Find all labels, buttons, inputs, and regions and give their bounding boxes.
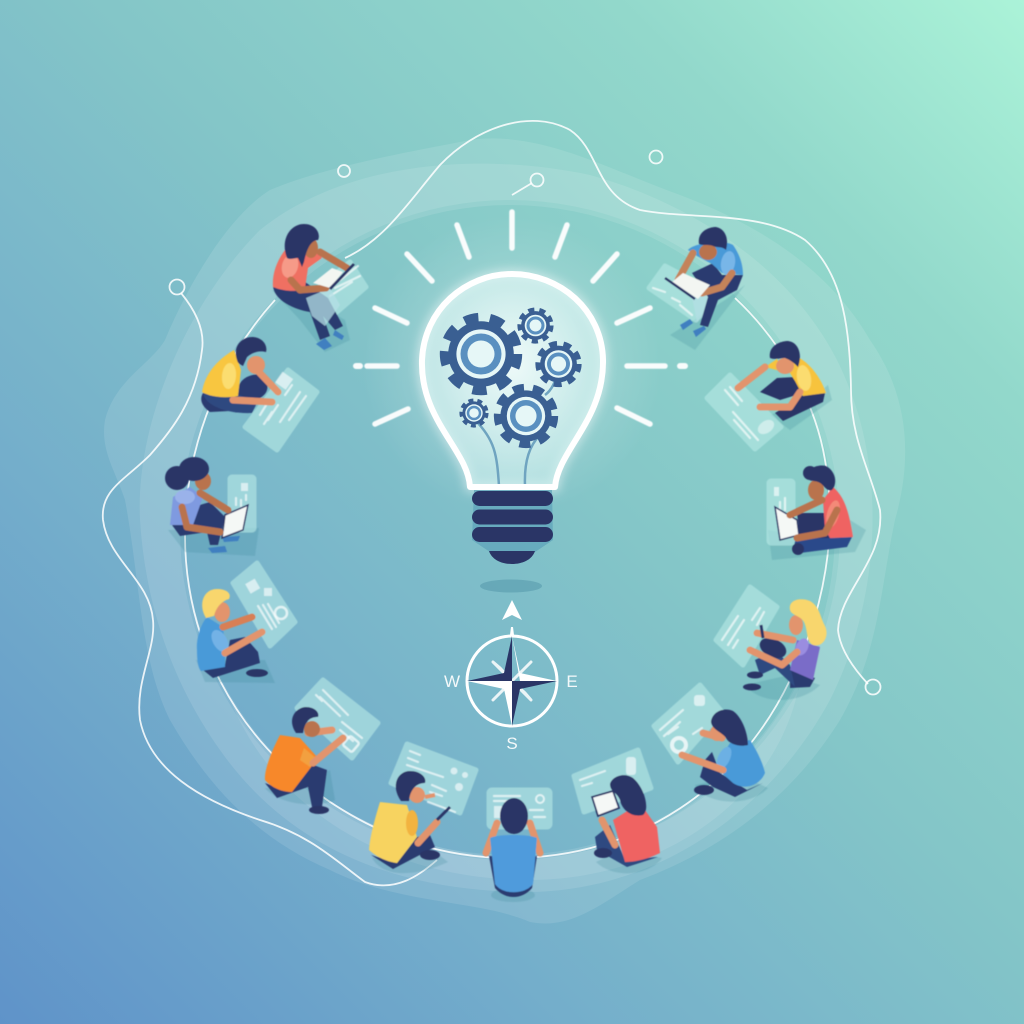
compass letters: W <box>444 672 460 691</box>
person 7: blue shirt seen from behind <box>486 790 550 902</box>
person 9: blue shirt with card <box>654 685 768 802</box>
person 12: yellow shirt with card <box>707 341 832 449</box>
person 1: red shirt with laptop <box>272 224 366 352</box>
compass letters: S <box>506 734 518 753</box>
compass letters <box>444 672 578 753</box>
light bulb <box>422 274 603 592</box>
small ring nodes <box>170 150 880 694</box>
person 4: blond with card <box>196 563 295 683</box>
translucent flowing ring <box>104 138 905 924</box>
circular connecting line <box>185 298 830 858</box>
person 2: yellow shirt with card <box>201 337 317 450</box>
central glow <box>362 215 662 515</box>
light rays <box>356 212 685 424</box>
person 3: purple shirt with tablet <box>165 457 259 556</box>
gears <box>445 310 579 444</box>
person 6: yellow shirt with stylus <box>369 744 476 873</box>
person 5: orange shirt with card <box>265 680 378 814</box>
compass <box>444 600 578 753</box>
person 13: blue shirt with laptop <box>649 227 745 350</box>
bulb screw base <box>472 490 553 564</box>
person 8: red shirt with tablet <box>574 750 662 873</box>
person 10: blond with purple shirt <box>716 587 827 700</box>
compass letters: E <box>566 672 578 691</box>
person 11: red shirt with tablet <box>768 466 866 560</box>
wavy line left <box>103 293 437 885</box>
wavy line right <box>345 121 880 684</box>
